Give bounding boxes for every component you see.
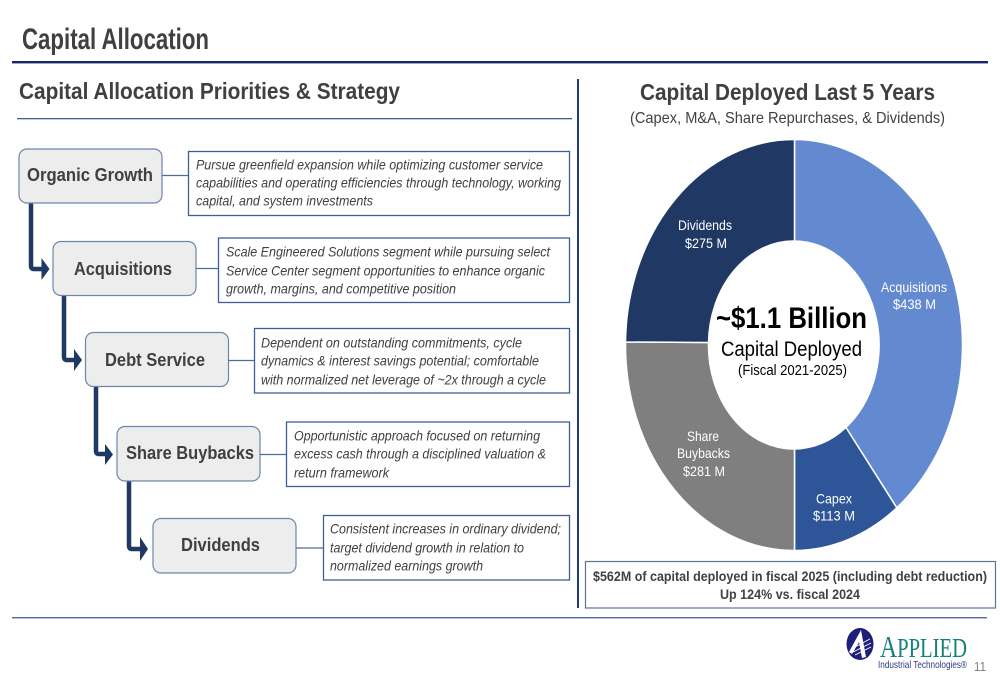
slice: capex — [794, 427, 897, 550]
label: acquisitions — [881, 279, 947, 312]
heading: capital deployed: Capital Deployed Last 5 Years — [640, 79, 935, 105]
priority: share buybacks — [117, 422, 570, 486]
label: capex: Capex — [816, 490, 852, 506]
priority: debt service — [86, 328, 570, 393]
label: capex — [813, 490, 855, 524]
label: dividends — [678, 217, 732, 251]
label: acquisitions: Acquisitions — [881, 279, 947, 295]
priority: acquisitions: Acquisitions — [74, 258, 172, 279]
priority: debt service: with normalized net leverage of ~2x through a cycle — [261, 372, 546, 388]
slice: dividends — [626, 139, 794, 342]
priority: dividends: Dividends — [181, 534, 260, 555]
donut chart — [625, 139, 962, 551]
priority: dividends: Consistent increases in ordinary dividend; — [330, 522, 561, 536]
slice: share buybacks — [625, 342, 794, 551]
priority: debt service: Debt Service — [105, 349, 205, 370]
label: dividends: $275 M — [685, 235, 727, 251]
priority: share buybacks: Opportunistic approach focused on returning — [294, 428, 540, 444]
priority: share buybacks: Share Buybacks — [126, 442, 254, 463]
page number: 11 — [974, 660, 986, 674]
panel: capital deployed last 5 years — [586, 79, 996, 608]
arrow: debt service to share buybacks — [96, 387, 113, 465]
priority: acquisitions: Service Center segment opportunities to enhance organic — [226, 264, 545, 278]
logo wordmark: APPLIED — [880, 629, 967, 664]
priority: organic growth: Organic Growth — [27, 164, 153, 185]
slice: acquisitions — [794, 140, 962, 508]
donut centre total — [716, 302, 867, 379]
priority: share buybacks: excess cash through a disciplined valuation & — [294, 446, 546, 462]
logo tagline: Industrial Technologies® — [878, 659, 967, 671]
label: acquisitions: $438 M — [893, 296, 936, 312]
title: Capital Allocation — [22, 23, 209, 56]
callout: fiscal 2025 capital deployed — [586, 562, 996, 608]
priority: share buybacks: return framework — [294, 466, 390, 480]
subheading: (Capex, M&A, Share Repurchases, & Dividends) — [630, 110, 945, 127]
callout: fiscal 2025 capital deployed: Up 124% vs. fiscal 2024 — [720, 587, 860, 602]
donut centre total: Capital Deployed — [721, 338, 862, 361]
priority: acquisitions: growth, margins, and competitive position — [226, 282, 456, 296]
arrow: share buybacks to dividends — [129, 481, 148, 561]
label: share buybacks — [677, 428, 730, 479]
label: dividends: Dividends — [678, 217, 732, 233]
priority: acquisitions: Scale Engineered Solutions segment while pursuing select — [226, 244, 551, 260]
label: share buybacks: $281 M — [683, 463, 725, 479]
priority: dividends: normalized earnings growth — [330, 558, 483, 574]
priority: debt service: Dependent on outstanding commitments, cycle — [261, 336, 522, 350]
donut centre total: ~$1.1 Billion — [716, 302, 867, 335]
heading: priorities and strategy: Capital Allocation Priorities & Strategy — [19, 78, 400, 104]
priority: debt service: dynamics & interest savings potential; comfortable — [261, 354, 539, 368]
label: capex: $113 M — [813, 508, 855, 524]
arrow: organic growth to acquisitions — [31, 203, 50, 280]
arrow: acquisitions to debt service — [64, 296, 82, 371]
priority: organic growth — [19, 149, 570, 216]
priority: dividends — [153, 516, 570, 580]
priority: organic growth: capabilities and operating efficiencies through technology, working — [196, 176, 561, 190]
label: share buybacks: Share — [687, 428, 719, 444]
priority: organic growth: capital, and system investments — [196, 194, 373, 208]
panel: capital allocation priorities and strategy — [19, 78, 570, 580]
priority: acquisitions — [53, 238, 570, 302]
donut centre total: (Fiscal 2021-2025) — [738, 363, 847, 379]
priority: dividends: target dividend growth in relation to — [330, 540, 524, 556]
priority: organic growth: Pursue greenfield expansion while optimizing customer service — [196, 158, 543, 172]
logo: Applied Industrial Technologies — [846, 628, 967, 671]
icon: logo emblem — [846, 628, 874, 660]
label: share buybacks: Buybacks — [677, 445, 730, 461]
